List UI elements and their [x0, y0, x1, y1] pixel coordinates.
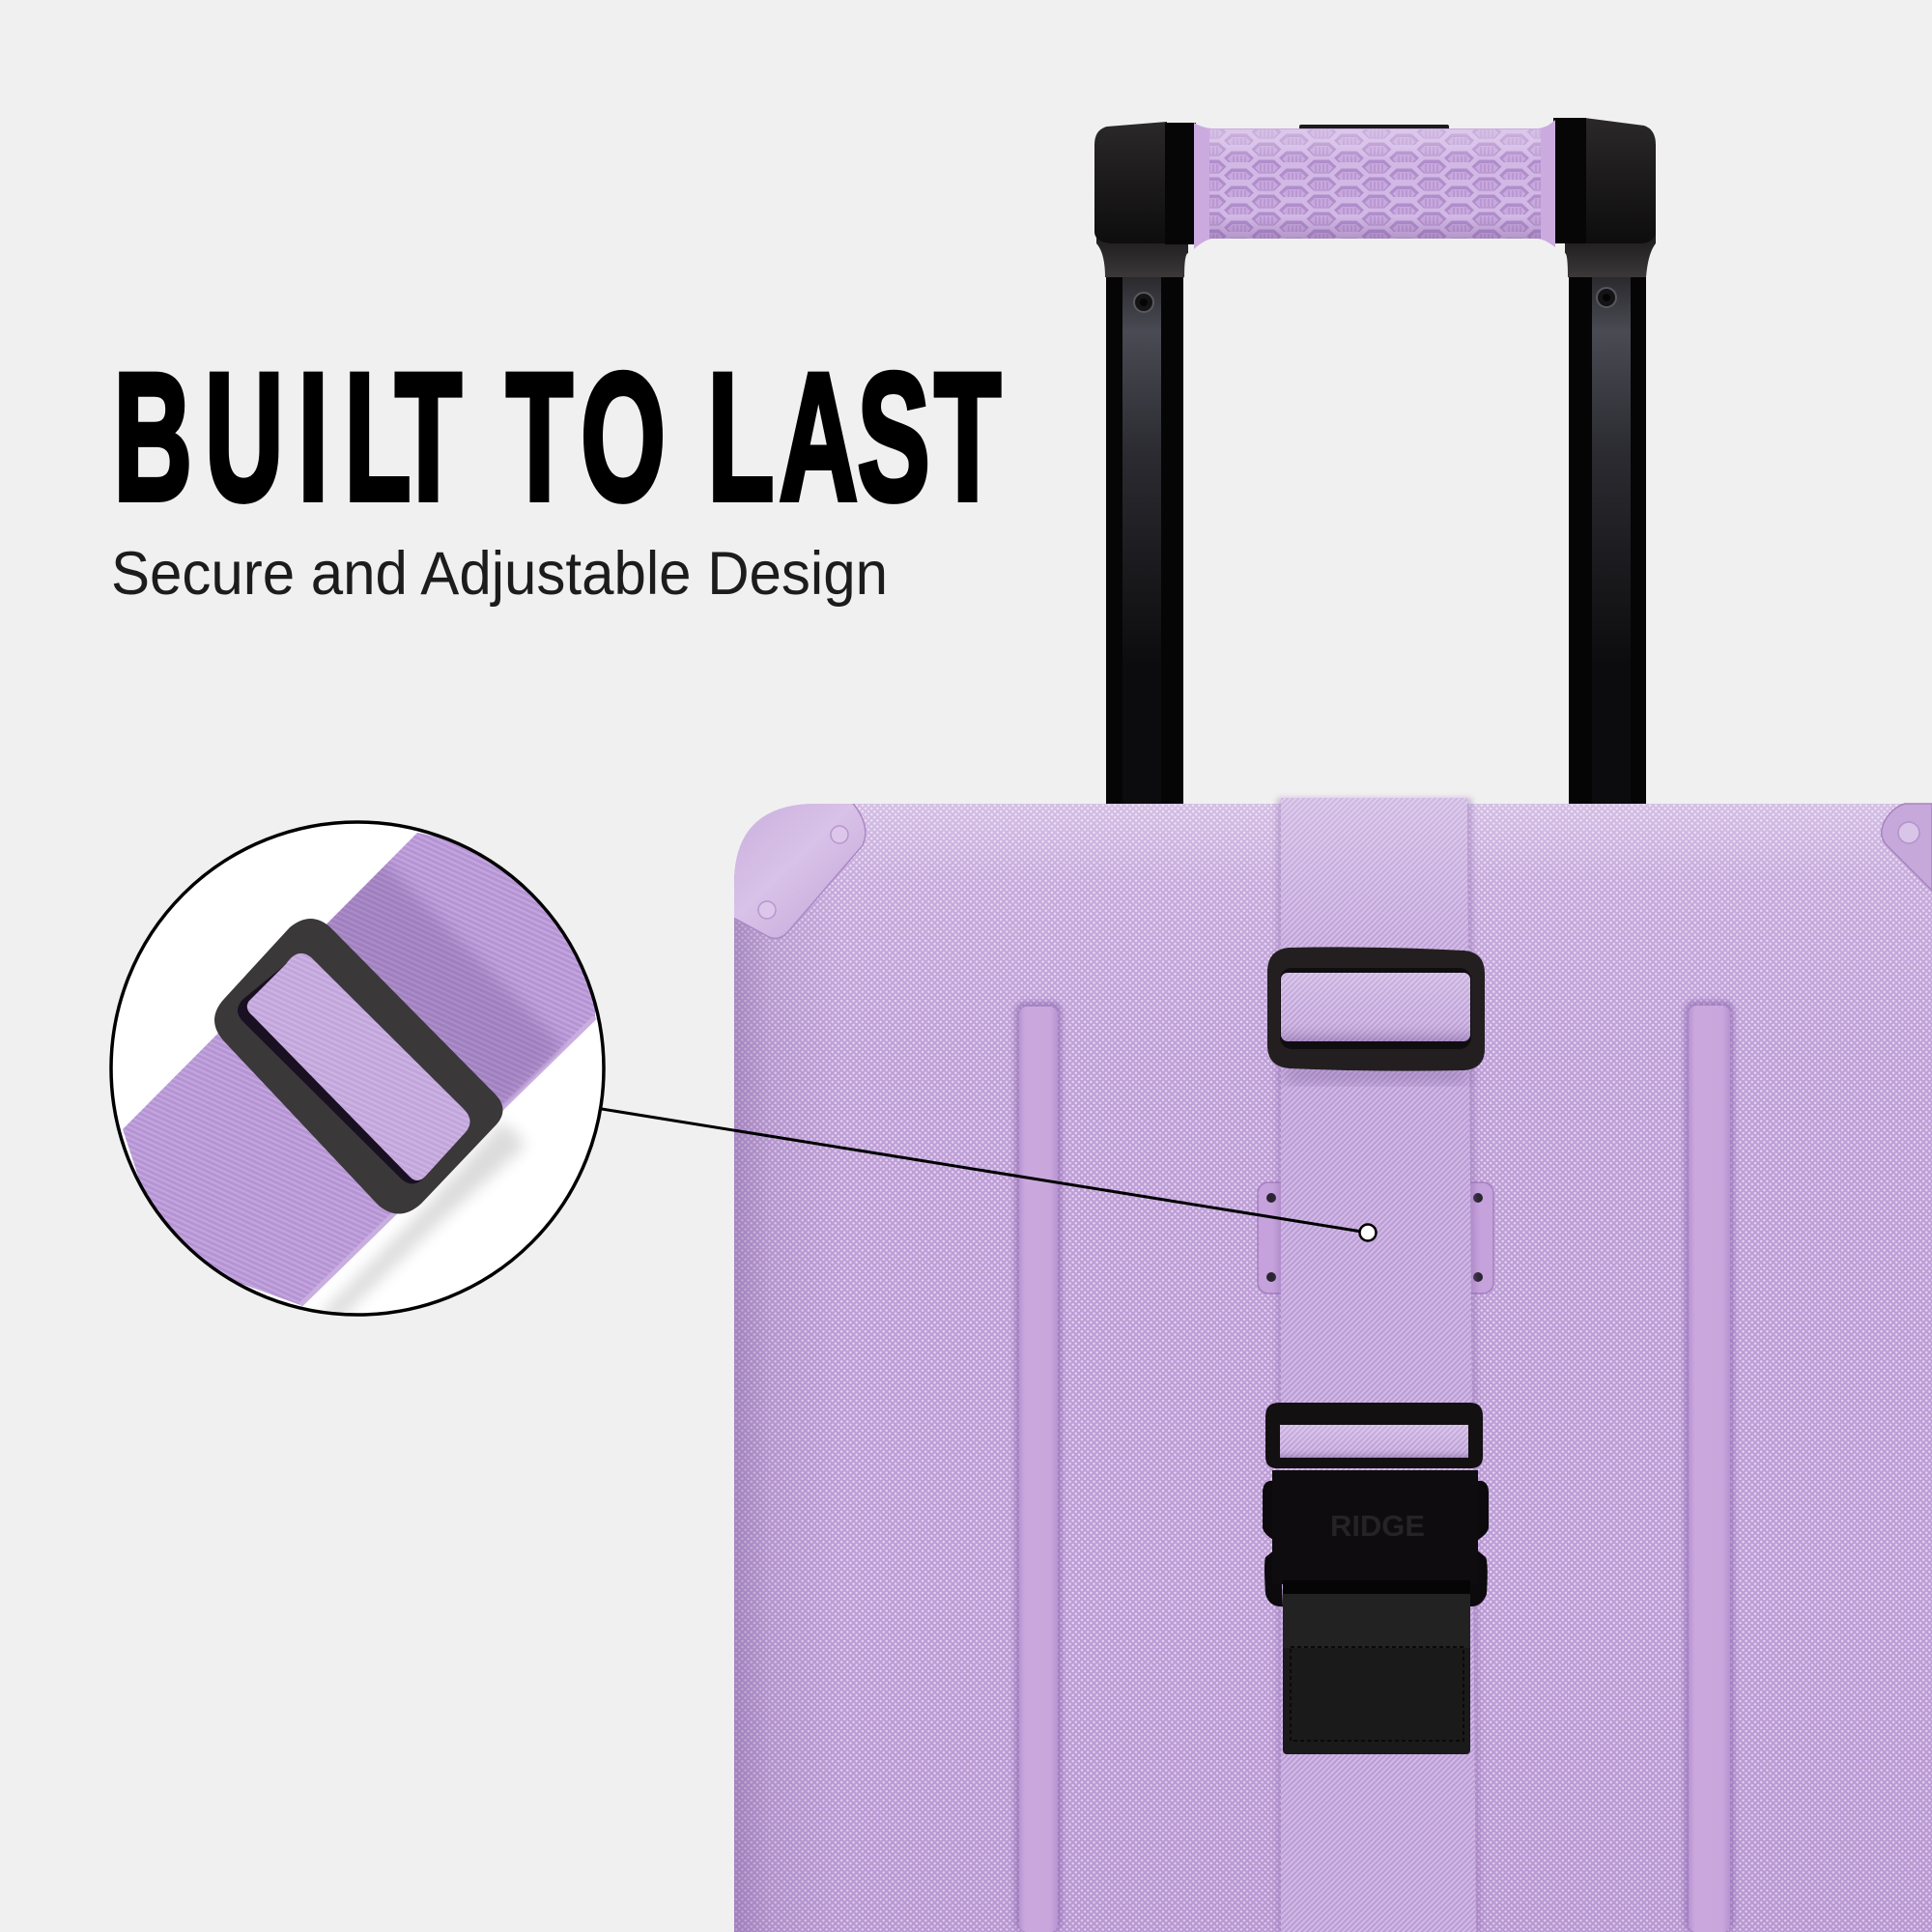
magnified strap detail — [111, 822, 604, 1325]
hexagon grip — [1194, 120, 1555, 249]
buckle body — [1272, 1470, 1478, 1584]
title: BUILT TO LAST — [113, 335, 1001, 538]
suitcase body — [715, 792, 1932, 1932]
strap inner edge — [300, 1017, 595, 1305]
raised rib: left — [1015, 1002, 1062, 1932]
buckle shadow on strap — [312, 855, 565, 1109]
magnifier ring — [111, 822, 604, 1315]
magnified buckle — [214, 919, 503, 1214]
raised rib: right — [1685, 1001, 1734, 1932]
handle cap: right — [1584, 118, 1656, 243]
telescopic handle — [1094, 118, 1656, 810]
strap bracket: left — [1258, 1182, 1291, 1293]
strap shadow — [319, 1121, 526, 1325]
handle collar: left — [1165, 123, 1196, 244]
embossed logo: RIDGE — [1330, 1509, 1425, 1543]
strap loop in buckle — [1281, 973, 1470, 1041]
upper slider buckle — [1267, 947, 1485, 1071]
luggage strap — [1277, 798, 1481, 1932]
corner protector: left — [734, 804, 867, 939]
corner protector: right — [1882, 804, 1932, 891]
buckle side clips — [1263, 1481, 1489, 1606]
strap bracket: right — [1459, 1182, 1493, 1293]
handle tube: right — [1565, 232, 1656, 810]
buckle opening shadow — [238, 953, 470, 1184]
buckle adjuster frame — [1265, 1403, 1483, 1468]
callout anchor dot — [1360, 1225, 1376, 1240]
strap through buckle — [247, 953, 470, 1180]
callout leader line — [602, 1109, 1368, 1233]
subtitle: Secure and Adjustable Design — [111, 540, 888, 608]
handle collar: right — [1553, 118, 1586, 243]
leather tab — [1283, 1580, 1470, 1754]
handle tube: left — [1096, 232, 1188, 810]
magnified strap band — [123, 833, 599, 1305]
grip top strip — [1299, 125, 1449, 130]
handle cap: left — [1094, 122, 1167, 243]
lower strap buckle — [1263, 1403, 1489, 1754]
